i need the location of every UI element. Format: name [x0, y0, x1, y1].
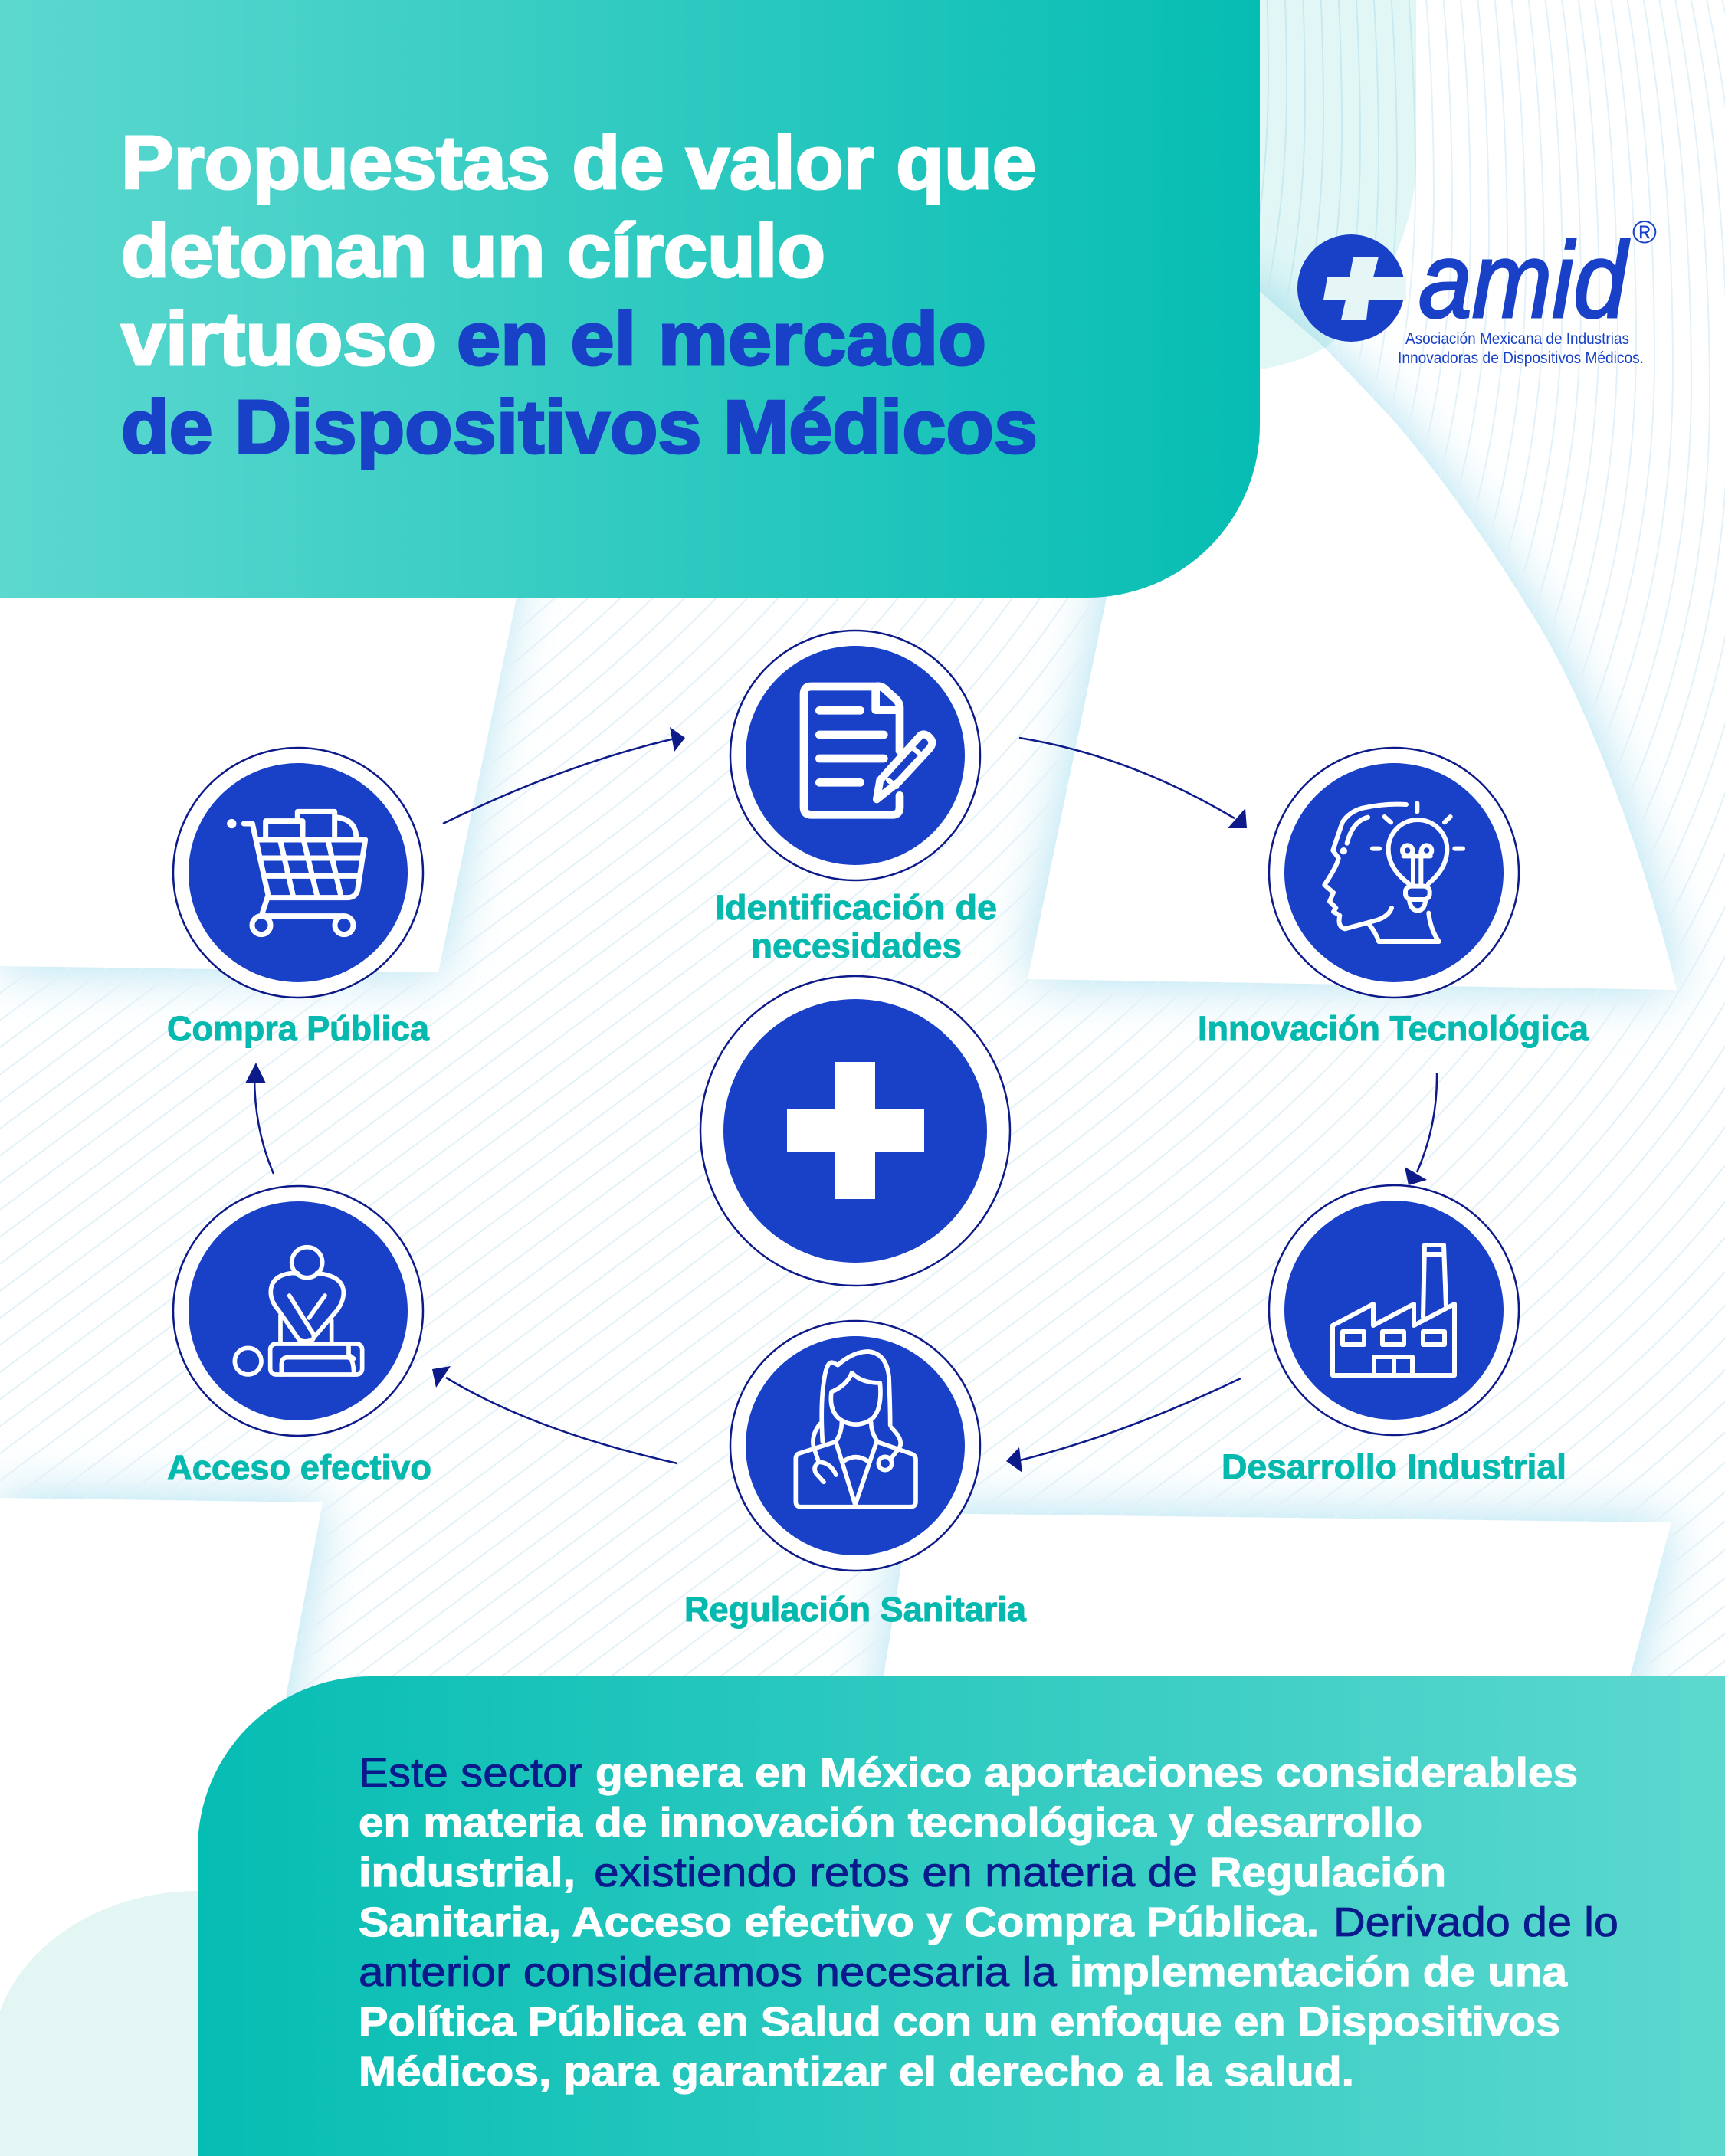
node: regulación sanitaria [684, 1321, 1027, 1629]
node: identificación de necesidades [715, 631, 997, 965]
icon: logo cross emblem [1297, 234, 1406, 342]
arrow: acceso to compra [245, 1063, 274, 1174]
footer text block: Médicos, para garantizar el derecho a la salud. [359, 2049, 1354, 2095]
node: compra pública [167, 748, 430, 1048]
panel: title header [0, 0, 1260, 598]
node: desarrollo industrial [1222, 1185, 1566, 1486]
footer text block: industrial, [359, 1850, 576, 1896]
registered mark: ® [1632, 214, 1657, 250]
footer text block: genera en México aportaciones considerables [595, 1750, 1578, 1796]
arrow: innovación to desarrollo [1405, 1073, 1437, 1185]
label: identificación de necesidades: Identificación de [715, 888, 997, 927]
title: virtuoso [121, 297, 436, 381]
footer text block: Derivado de lo [1333, 1899, 1618, 1945]
icon: factory [1333, 1245, 1454, 1375]
title: Propuestas de valor que [121, 120, 1036, 205]
arrow: compra to identificación [443, 727, 685, 824]
label: acceso efectivo: Acceso efectivo [167, 1448, 431, 1487]
footer text block [359, 1750, 1618, 2095]
logo tagline: Innovadoras de Dispositivos Médicos. [1398, 349, 1644, 367]
logo tagline [1398, 330, 1644, 367]
footer text block: Política Pública en Salud con un enfoque en Dispositivos [359, 1999, 1560, 2045]
label: compra pública: Compra Pública [167, 1009, 430, 1048]
footer text block: Este sector [359, 1750, 582, 1796]
label: regulación sanitaria: Regulación Sanitaria [684, 1590, 1027, 1629]
icon: head with light bulb [1324, 803, 1463, 942]
icon: shopping cart [230, 811, 366, 935]
footer text block: implementación de una [1070, 1949, 1568, 1995]
node: innovación tecnológica [1198, 748, 1589, 1048]
icon: cpr [234, 1247, 362, 1375]
title [121, 120, 1038, 469]
central medical cross [700, 976, 1010, 1286]
arrow: identificación to innovación [1019, 738, 1247, 828]
label: desarrollo industrial: Desarrollo Industrial [1222, 1447, 1566, 1486]
footer text block: existiendo retos en materia de [594, 1850, 1198, 1896]
logo: amid [1297, 214, 1657, 367]
footer text block: anterior consideramos necesaria la [359, 1949, 1058, 1995]
arrow: desarrollo to regulación [1006, 1378, 1241, 1473]
icon: document and pen [804, 686, 932, 814]
title: detonan un círculo [121, 208, 825, 293]
label: identificación de necesidades: necesidades [751, 926, 962, 965]
footer text block: Sanitaria, Acceso efectivo y Compra Pública. [359, 1899, 1319, 1945]
logo wordmark: amid [1418, 220, 1630, 340]
label: identificación de necesidades [715, 888, 997, 965]
title: de Dispositivos Médicos [121, 385, 1038, 469]
node: acceso efectivo [167, 1186, 431, 1487]
panel: footer [198, 1676, 1725, 2156]
logo tagline: Asociación Mexicana de Industrias [1405, 330, 1629, 348]
arrow: regulación to acceso [432, 1366, 677, 1463]
footer text block: Regulación [1210, 1850, 1446, 1896]
footer text block: en materia de innovación tecnológica y desarrollo [359, 1800, 1422, 1846]
icon: doctor [795, 1352, 916, 1507]
title: en el mercado [457, 297, 986, 381]
label: innovación tecnológica: Innovación Tecnológica [1198, 1009, 1589, 1048]
